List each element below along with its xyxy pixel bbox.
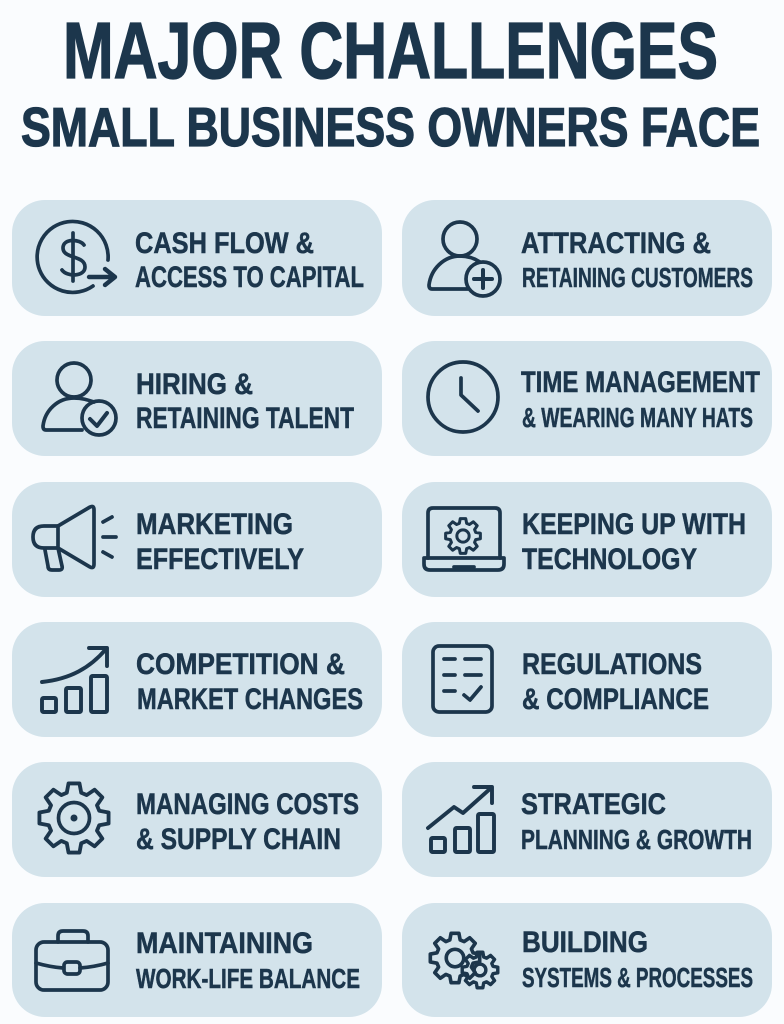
text: hiring: RETAINING TALENT (136, 402, 354, 435)
text: competition: MARKET CHANGES (137, 683, 363, 716)
text: costs (136, 788, 359, 856)
icon: clock (428, 362, 498, 432)
icon: laptop with gear (424, 508, 504, 570)
panel: competition (12, 622, 382, 737)
icon: briefcase (36, 931, 108, 990)
icon: dollar with arrow (37, 221, 115, 292)
icon: two gears (430, 933, 498, 988)
panel: attracting customers (402, 200, 772, 316)
panel: technology (402, 482, 772, 597)
text: hiring: HIRING & (136, 368, 253, 401)
icon: growth chart (428, 787, 494, 852)
text: cash flow: CASH FLOW & (135, 227, 314, 260)
icon: person with plus (429, 222, 500, 296)
panel: work-life balance (12, 903, 382, 1017)
panel: time management (402, 341, 772, 456)
text: cash flow (135, 227, 364, 294)
text: time management (521, 366, 760, 433)
panel: hiring (12, 341, 382, 456)
panel: strategic planning (402, 762, 772, 877)
text: competition: COMPETITION & (136, 648, 345, 681)
text: regulations: REGULATIONS (522, 648, 702, 681)
icon: person with check (43, 363, 116, 435)
text: costs: & SUPPLY CHAIN (136, 823, 341, 856)
text: attracting customers: ATTRACTING & (521, 227, 711, 260)
text: hiring (136, 368, 354, 435)
text: marketing: MARKETING (136, 508, 293, 541)
text: strategic planning (521, 788, 752, 855)
panel: costs (12, 762, 382, 877)
text: systems: BUILDING (522, 926, 648, 959)
text: work-life balance: WORK-LIFE BALANCE (136, 963, 360, 994)
icon: gear (39, 783, 109, 853)
icon: rising chart with curve (42, 648, 107, 712)
icon: megaphone (33, 506, 116, 570)
text: cash flow: ACCESS TO CAPITAL (135, 261, 364, 294)
text: systems (522, 926, 753, 993)
text: costs: MANAGING COSTS (136, 788, 359, 821)
text: regulations (522, 648, 709, 716)
panel: systems (402, 903, 772, 1017)
panel: cash flow (12, 200, 382, 316)
text: marketing (136, 508, 304, 576)
text: competition (136, 648, 363, 716)
text: technology: KEEPING UP WITH (522, 508, 746, 541)
text: marketing: EFFECTIVELY (136, 543, 304, 576)
text: strategic planning: STRATEGIC (521, 788, 666, 821)
text: work-life balance: MAINTAINING (136, 927, 313, 960)
panel: regulations (402, 622, 772, 737)
text: technology: TECHNOLOGY (522, 543, 697, 576)
text: work-life balance (136, 927, 360, 994)
panel: marketing (12, 482, 382, 597)
title (21, 6, 760, 158)
text: regulations: & COMPLIANCE (522, 683, 709, 716)
icon: checklist (433, 646, 492, 712)
text: technology (522, 508, 746, 576)
text: attracting customers (521, 227, 753, 293)
